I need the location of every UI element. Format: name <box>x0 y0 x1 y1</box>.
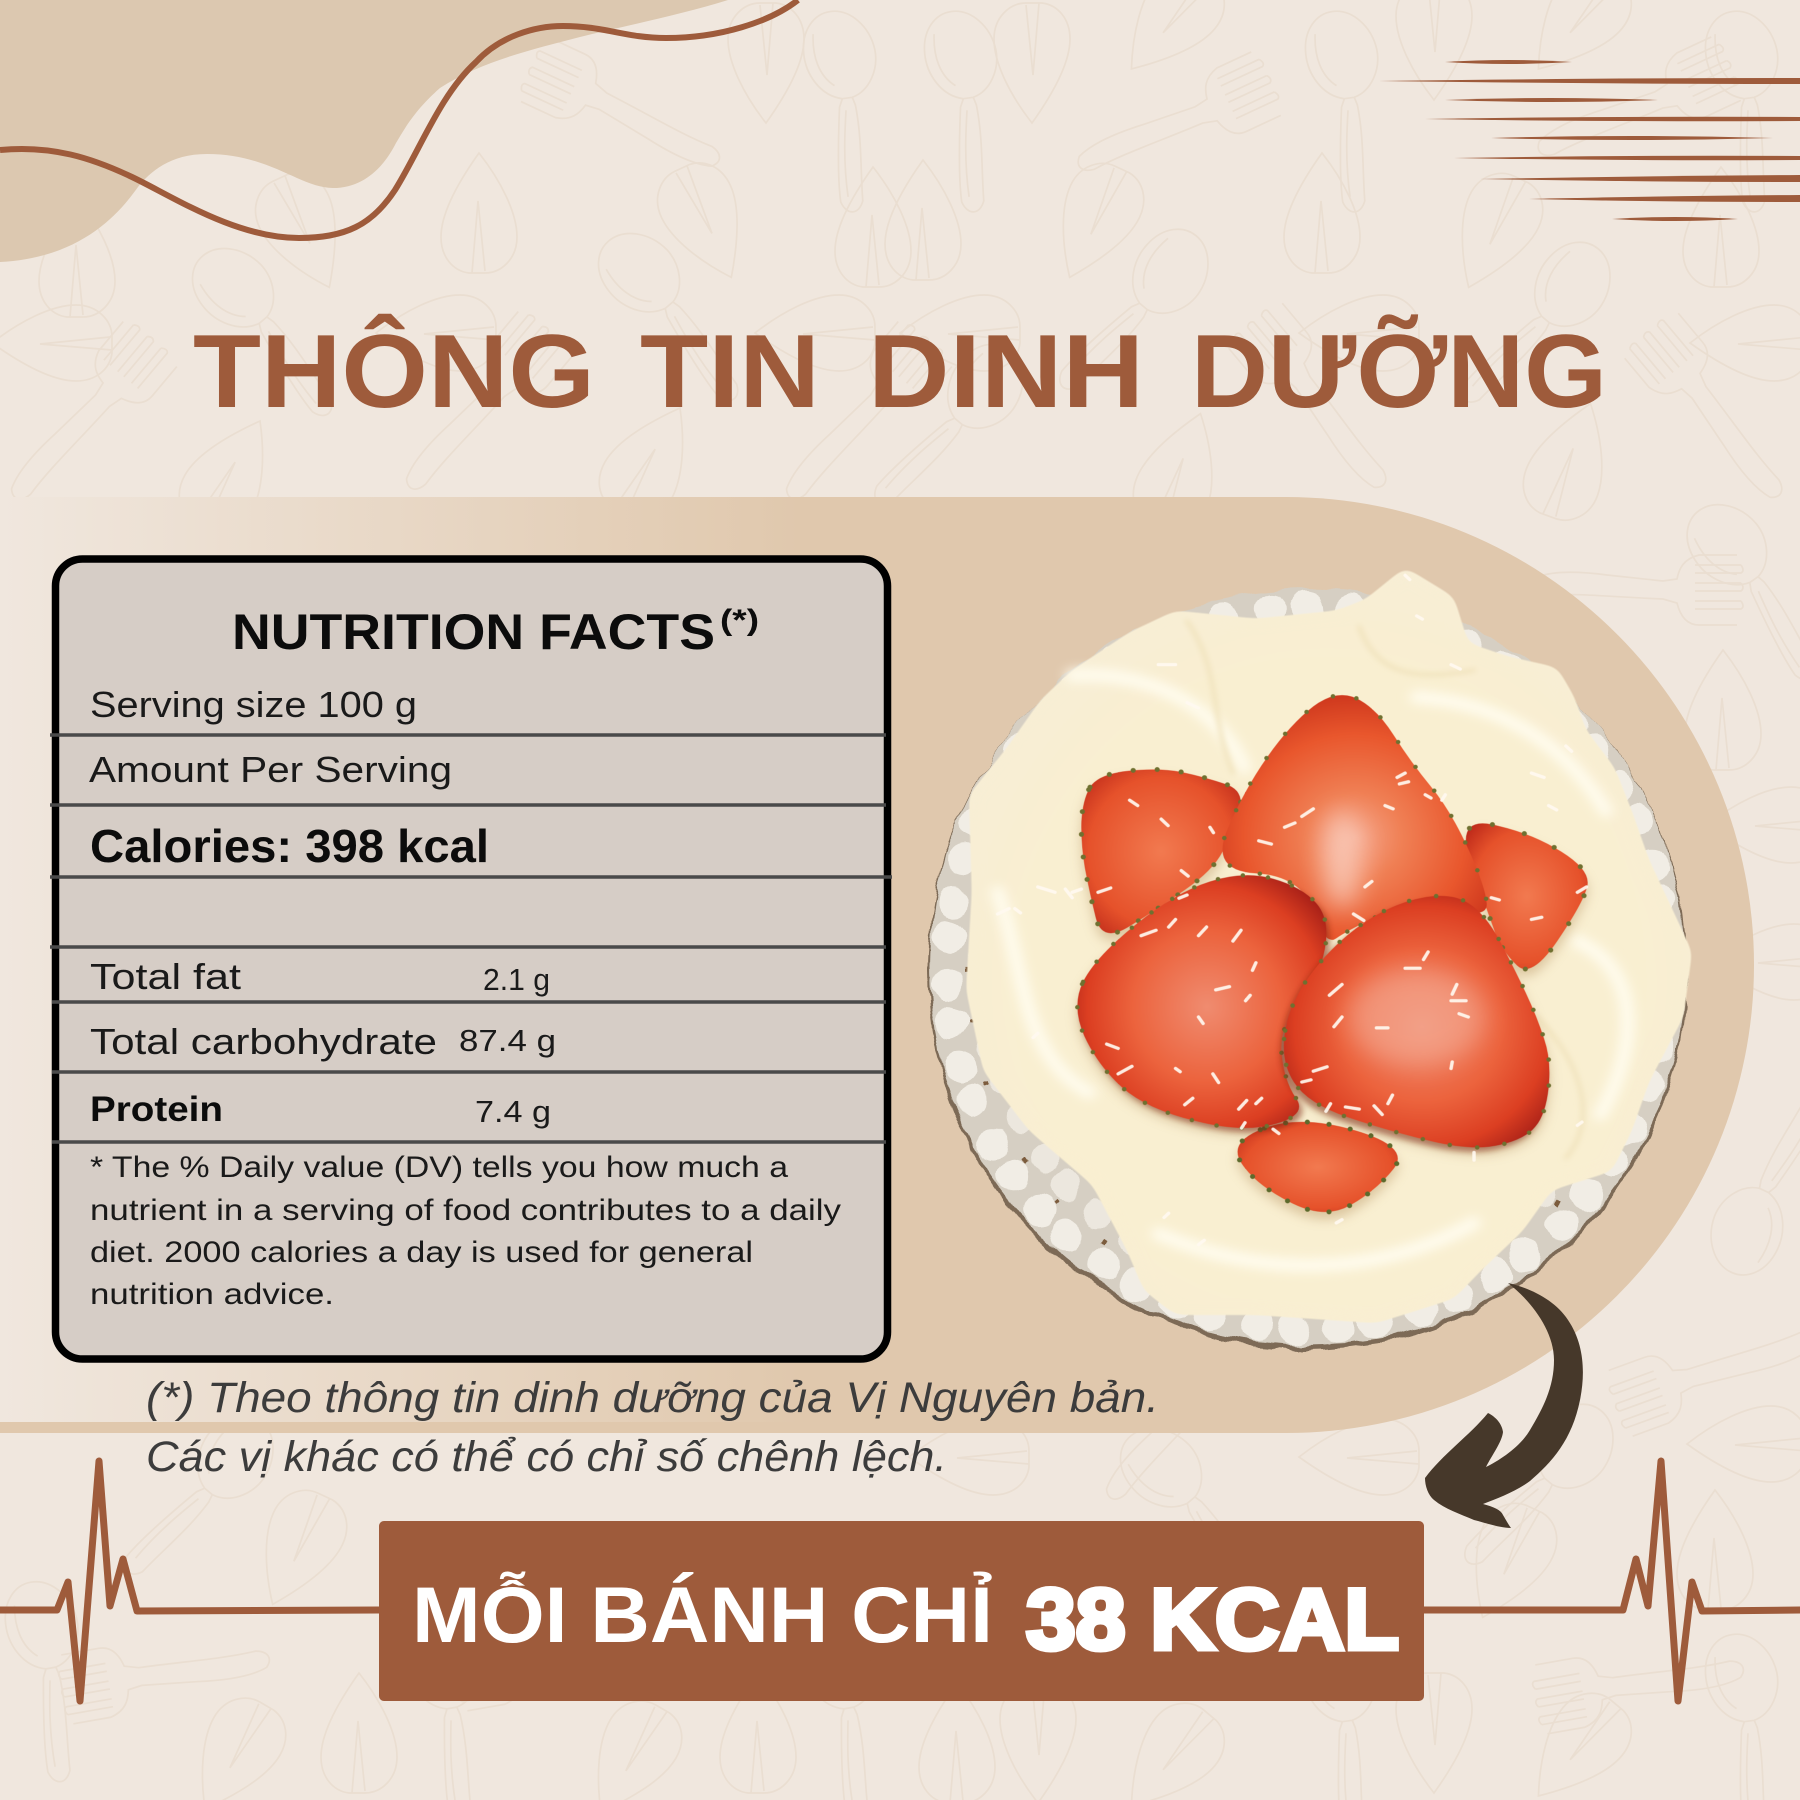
total carbohydrate value: 87.4 g <box>459 1023 556 1058</box>
decorative blob top left <box>0 0 728 262</box>
title: TIN <box>640 314 820 430</box>
footnote <box>146 1374 1159 1481</box>
strawberry slice: front left <box>1077 875 1330 1132</box>
daily value footnote: diet. 2000 calories a day is used for general <box>90 1236 753 1269</box>
coconut flakes <box>998 575 1587 1245</box>
title: DƯỠNG <box>1191 314 1607 430</box>
footnote: Các vị khác có thể có chỉ số chênh lệch. <box>146 1433 947 1481</box>
rice cake base <box>927 589 1687 1350</box>
daily value footnote: * The % Daily value (DV) tells you how much a <box>90 1151 788 1184</box>
title <box>193 313 1607 430</box>
strawberry slice: bottom <box>1238 1122 1398 1212</box>
heading asterisk note: (*) <box>720 604 759 637</box>
strawberry slice: front right <box>1280 896 1549 1152</box>
footnote: (*) Theo thông tin dinh dưỡng của Vị Nguyên bản. <box>146 1374 1159 1422</box>
strawberry slice: back left <box>1081 769 1241 933</box>
image: rice cake with cream and strawberries <box>927 567 1692 1350</box>
serving size: Serving size 100 g <box>90 684 417 725</box>
arrow <box>1425 1283 1583 1528</box>
daily value footnote: nutrient in a serving of food contributes to a daily <box>90 1194 841 1227</box>
callout banner <box>379 1521 1424 1701</box>
protein value: 7.4 g <box>475 1094 551 1129</box>
strawberry shadows <box>1077 777 1588 1220</box>
amount per serving: Amount Per Serving <box>89 749 452 790</box>
total carbohydrate: Total carbohydrate <box>90 1021 437 1062</box>
main band panel <box>0 497 1754 1433</box>
panel: nutrition facts card <box>50 559 892 1359</box>
total fat: Total fat <box>90 956 241 997</box>
heartbeat line right <box>1423 1461 1800 1701</box>
strawberry slice: top centre <box>1222 695 1487 940</box>
strawberry slice: right <box>1466 823 1588 969</box>
banner text: MỖI BÁNH CHỈ <box>412 1570 993 1659</box>
banner value: 38 KCAL <box>1026 1572 1399 1668</box>
calories: Calories: 398 kcal <box>90 820 489 872</box>
card heading: NUTRITION FACTS <box>232 604 715 660</box>
heartbeat line left <box>0 1461 379 1701</box>
daily value footnote <box>90 1151 841 1311</box>
title: THÔNG <box>193 313 595 430</box>
daily value footnote: nutrition advice. <box>90 1278 334 1311</box>
wavy line top left <box>0 0 798 238</box>
decorative tapered lines top right <box>1379 60 1800 221</box>
total fat value: 2.1 g <box>483 962 550 997</box>
cream spread <box>966 567 1692 1323</box>
title: DINH <box>868 314 1144 430</box>
protein: Protein <box>90 1090 223 1129</box>
